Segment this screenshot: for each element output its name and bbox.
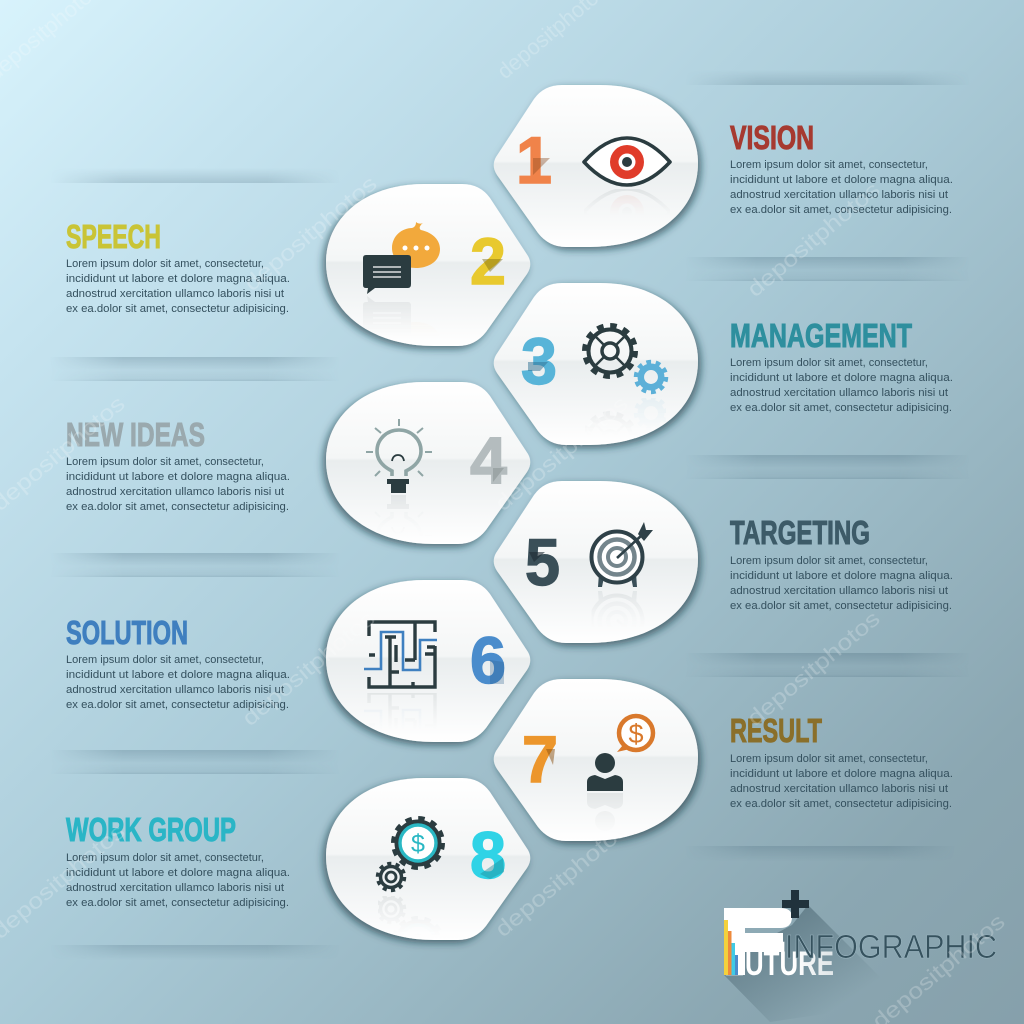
card 7: result	[494, 679, 698, 868]
number 5: 5	[525, 525, 560, 599]
number 6: 6	[470, 623, 506, 697]
text block: speech	[66, 218, 290, 315]
number 4: 4	[470, 423, 507, 497]
logo: future infographic: F	[718, 893, 790, 995]
card 6: solution	[326, 580, 530, 758]
card 8: work group	[326, 778, 530, 967]
number 7: 7	[522, 722, 558, 796]
icon: gears with dollar: $	[411, 830, 425, 858]
icon: maze	[364, 622, 437, 687]
text block: management: incididunt ut labore et dolore magna aliqua.	[730, 372, 953, 384]
text block: vision: incididunt ut labore et dolore magna aliqua.	[730, 174, 953, 186]
number 3: 3	[521, 324, 557, 398]
text block: result: ex ea.dolor sit amet, consectetur adipisicing.	[730, 798, 952, 810]
logo: future infographic: INFOGRAPHIC	[785, 928, 997, 965]
text block: targeting: ex ea.dolor sit amet, consectetur adipisicing.	[730, 600, 952, 612]
watermark: depositphotos	[239, 171, 382, 296]
text block: solution	[66, 614, 290, 711]
number 8: 8	[470, 818, 506, 892]
watermark: depositphotos	[742, 606, 885, 731]
text block: work group: incididunt ut labore et dolore magna aliqua.	[66, 867, 290, 879]
text block: vision	[730, 119, 953, 216]
text block: solution: ex ea.dolor sit amet, consectetur adipisicing.	[66, 699, 289, 711]
card 4: new ideas	[326, 382, 530, 569]
text block: vision: adnostrud xercitation ullamco laboris nisi ut	[730, 189, 948, 201]
card 2: speech	[326, 184, 530, 368]
text block: management: ex ea.dolor sit amet, consectetur adipisicing.	[730, 402, 952, 414]
text block: speech: adnostrud xercitation ullamco laboris nisi ut	[66, 288, 284, 300]
text block: solution: SOLUTION	[66, 614, 188, 651]
text block: targeting	[730, 514, 953, 612]
card 3: management	[494, 283, 698, 464]
text block: result: incididunt ut labore et dolore magna aliqua.	[730, 768, 953, 780]
icon: target with arrow	[592, 522, 653, 587]
text block: work group: adnostrud xercitation ullamco laboris nisi ut	[66, 882, 284, 894]
text block: vision: Lorem ipsum dolor sit amet, consectetur,	[730, 159, 928, 171]
text block: speech: ex ea.dolor sit amet, consectetur adipisicing.	[66, 303, 289, 315]
card 1: vision	[494, 85, 698, 247]
text block: new ideas: NEW IDEAS	[66, 416, 205, 453]
text block: new ideas: incididunt ut labore et dolore magna aliqua.	[66, 471, 290, 483]
text block: result: RESULT	[730, 712, 822, 749]
icon: person with dollar bubble	[587, 716, 653, 791]
number 2: 2	[470, 224, 506, 298]
text block: result	[730, 712, 953, 810]
icon: eye	[584, 138, 670, 185]
logo: future infographic: UTURE	[745, 945, 834, 983]
watermark: depositphotos	[742, 177, 885, 302]
text block: result: Lorem ipsum dolor sit amet, consectetur,	[730, 753, 928, 765]
text block: targeting: adnostrud xercitation ullamco laboris nisi ut	[730, 585, 948, 597]
text block: work group: ex ea.dolor sit amet, consectetur adipisicing.	[66, 897, 289, 909]
text block: new ideas	[66, 416, 290, 513]
icon: light bulb	[366, 419, 432, 493]
text block: management	[730, 317, 953, 414]
text block: vision: VISION	[730, 119, 814, 156]
icon: person with dollar bubble: $	[628, 719, 644, 749]
text block: speech: incididunt ut labore et dolore magna aliqua.	[66, 273, 290, 285]
text block: result: adnostrud xercitation ullamco laboris nisi ut	[730, 783, 948, 795]
text block: targeting: TARGETING	[730, 514, 870, 551]
text block: work group	[66, 811, 290, 909]
text block: speech: Lorem ipsum dolor sit amet, consectetur,	[66, 258, 264, 270]
text block: speech: SPEECH	[66, 218, 161, 255]
text block: solution: adnostrud xercitation ullamco laboris nisi ut	[66, 684, 284, 696]
text block: new ideas: Lorem ipsum dolor sit amet, consectetur,	[66, 456, 264, 468]
text block: solution: incididunt ut labore et dolore magna aliqua.	[66, 669, 290, 681]
text block: targeting: Lorem ipsum dolor sit amet, consectetur,	[730, 555, 928, 567]
panel shadows	[50, 70, 970, 960]
text block: management: Lorem ipsum dolor sit amet, consectetur,	[730, 357, 928, 369]
text block: work group: WORK GROUP	[66, 811, 236, 848]
card 5: targeting	[494, 481, 698, 656]
text block: management: adnostrud xercitation ullamco laboris nisi ut	[730, 387, 948, 399]
logo: future infographic	[718, 890, 997, 1022]
watermark: depositphotos	[490, 391, 633, 516]
icon: gears	[585, 326, 666, 392]
text block: work group: Lorem ipsum dolor sit amet, consectetur,	[66, 852, 264, 864]
watermark: depositphotos	[237, 606, 380, 731]
text block: vision: ex ea.dolor sit amet, consectetur adipisicing.	[730, 204, 952, 216]
text block: solution: Lorem ipsum dolor sit amet, consectetur,	[66, 654, 264, 666]
text block: management: MANAGEMENT	[730, 317, 912, 354]
number 1: 1	[516, 123, 552, 197]
icon: speech bubbles	[363, 222, 440, 294]
icon: gears with dollar	[378, 819, 442, 890]
text block: new ideas: adnostrud xercitation ullamco laboris nisi ut	[66, 486, 284, 498]
text block: targeting: incididunt ut labore et dolore magna aliqua.	[730, 570, 953, 582]
watermark: depositphotos	[490, 817, 633, 942]
text block: new ideas: ex ea.dolor sit amet, consectetur adipisicing.	[66, 501, 289, 513]
